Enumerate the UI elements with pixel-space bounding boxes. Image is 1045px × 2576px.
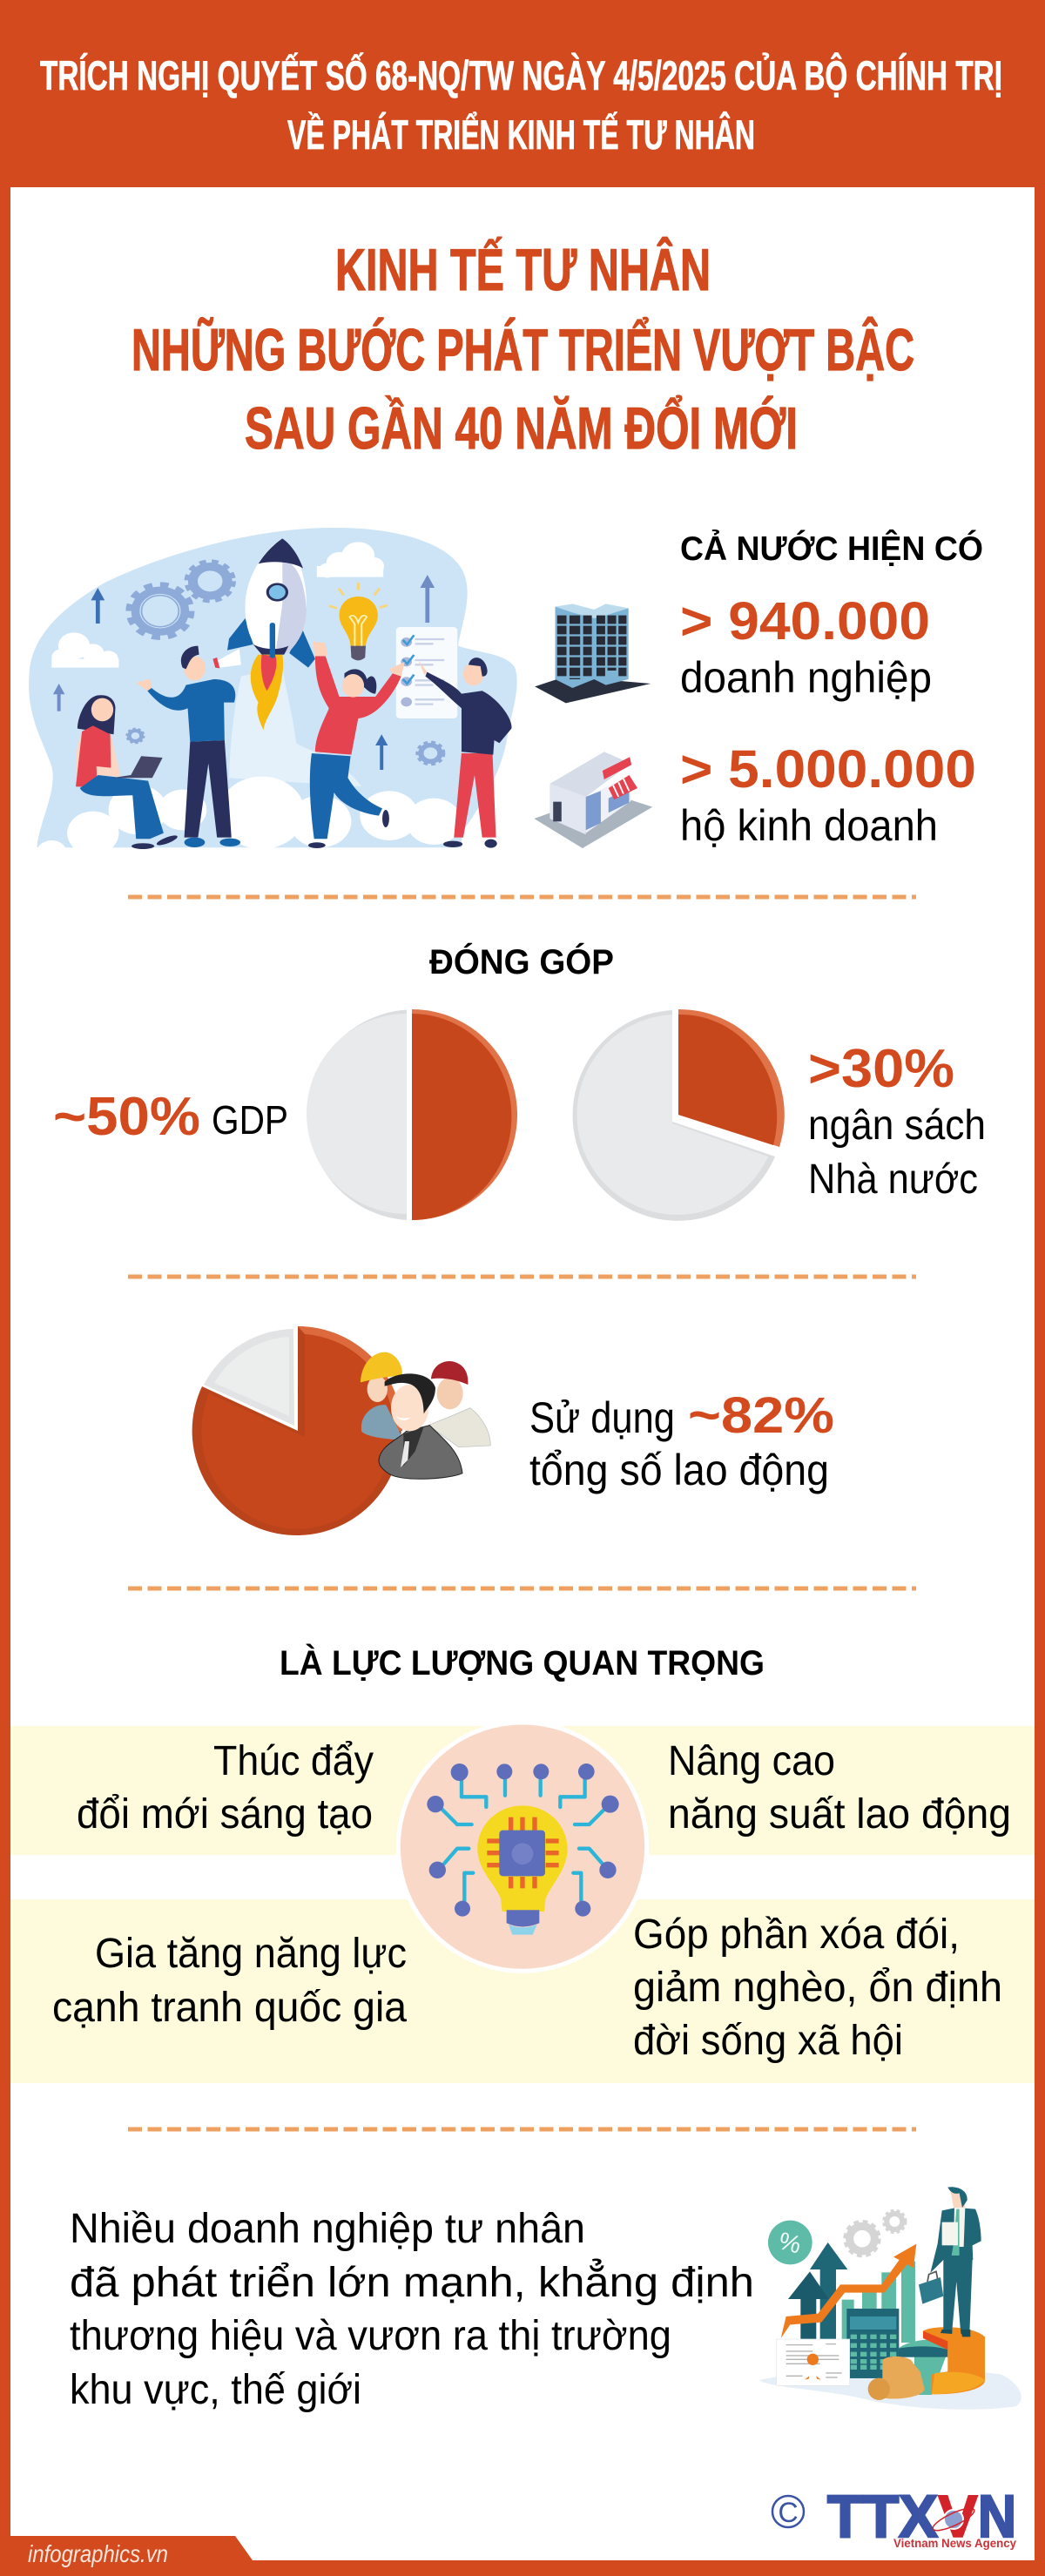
icon: clouds	[51, 542, 384, 668]
header band text: VỀ PHÁT TRIỂN KINH TẾ TƯ NHÂN	[287, 111, 755, 158]
header band text	[40, 52, 1002, 158]
text: closing statement: Nhiều doanh nghiệp tư nhân	[70, 2206, 585, 2252]
icon: workers group	[361, 1352, 490, 1479]
label: 50% GDP: GDP	[212, 1097, 288, 1143]
text: closing statement: thương hiệu và vươn ra thị trường	[70, 2313, 671, 2359]
heading: important force: LÀ LỰC LƯỢNG QUAN TRỌNG	[280, 1643, 765, 1682]
heading: contribution: ĐÓNG GÓP	[429, 941, 614, 981]
text: innovation: đổi mới sáng tạo	[77, 1791, 373, 1838]
stat: household businesses: hộ kinh doanh	[680, 801, 938, 850]
stat: enterprises: > 940.000	[680, 591, 930, 651]
main title	[131, 236, 914, 462]
stat: enterprises: doanh nghiệp	[680, 653, 932, 702]
source: infographics.vn: infographics.vn	[28, 2540, 168, 2567]
text: poverty reduction	[633, 1912, 1002, 2064]
logo: TTXVN Vietnam News Agency: TTX	[827, 2483, 938, 2550]
icon: rocket	[227, 538, 315, 730]
text: poverty reduction: đời sống xã hội	[633, 2018, 903, 2064]
text: competitiveness: Gia tăng năng lực	[95, 1931, 407, 1977]
icon: gears	[127, 562, 443, 764]
stat: household businesses: > 5.000.000	[680, 739, 976, 799]
pie chart: 50% GDP	[307, 1009, 517, 1220]
icon: checklist	[396, 627, 457, 718]
text: productivity: Nâng cao	[668, 1738, 835, 1784]
heading: nationwide: CẢ NƯỚC HIỆN CÓ	[680, 529, 983, 568]
label: 30% state budget: >30%	[808, 1039, 954, 1099]
person: woman cheering	[308, 642, 405, 848]
text: closing statement: khu vực, thế giới	[70, 2367, 361, 2413]
person: man with megaphone	[136, 646, 241, 847]
label: 30% state budget: Nhà nước	[808, 1157, 978, 1203]
text: productivity	[668, 1738, 1011, 1838]
logo: TTXVN Vietnam News Agency: Vietnam News Agency	[893, 2536, 1016, 2550]
main title: SAU GẦN 40 NĂM ĐỔI MỚI	[245, 394, 798, 462]
text: poverty reduction: Góp phần xóa đói,	[633, 1912, 960, 1958]
text: competitiveness	[52, 1931, 407, 2031]
illustration: team launching rocket	[29, 528, 517, 867]
logo: TTXVN Vietnam News Agency: N	[978, 2483, 1016, 2550]
pie chart: 30% state budget	[573, 1009, 785, 1221]
icon: light bulb	[330, 583, 387, 660]
panel: lower yellow band	[10, 1899, 1035, 2083]
person: man pointing	[419, 657, 511, 848]
text: closing statement: đã phát triển lớn mạnh, khẳng định	[70, 2258, 754, 2306]
label: 30% state budget: ngân sách	[808, 1103, 986, 1149]
label: 30% state budget	[808, 1039, 986, 1203]
logo: TTXVN Vietnam News Agency	[772, 2483, 1016, 2550]
logo: TTXVN Vietnam News Agency: C	[778, 2497, 799, 2528]
illustration: business growth: %	[776, 2227, 804, 2260]
text: competitiveness: cạnh tranh quốc gia	[52, 1985, 407, 2031]
label: 50% GDP	[53, 1087, 288, 1147]
label: 82% labour: ~82%	[688, 1387, 834, 1444]
stat: enterprises	[680, 591, 932, 702]
icon: arrows up	[53, 575, 435, 770]
text: innovation	[77, 1738, 374, 1838]
illustration: business growth	[759, 2187, 1021, 2410]
text: productivity: năng suất lao động	[668, 1791, 1011, 1838]
text: innovation: Thúc đẩy	[213, 1738, 374, 1784]
main title: KINH TẾ TƯ NHÂN	[335, 236, 711, 303]
logo: TTXVN Vietnam News Agency: V	[938, 2483, 978, 2550]
icon: circuit bulb in circle	[398, 1723, 647, 1971]
panel: upper yellow band	[10, 1726, 1035, 1855]
person: woman with laptop	[76, 695, 179, 849]
label: 82% labour: Sử dụng	[529, 1393, 675, 1442]
label: 50% GDP: ~50%	[53, 1087, 200, 1147]
label: 82% labour	[529, 1387, 834, 1494]
pie chart: 82% labour	[192, 1326, 402, 1535]
text: poverty reduction: giảm nghèo, ổn định	[633, 1965, 1002, 2011]
stat: household businesses	[680, 739, 976, 850]
icon: office building	[535, 604, 651, 703]
label: 82% labour: tổng số lao động	[529, 1446, 829, 1494]
icon: shop	[534, 752, 652, 848]
text: closing statement	[70, 2206, 754, 2413]
